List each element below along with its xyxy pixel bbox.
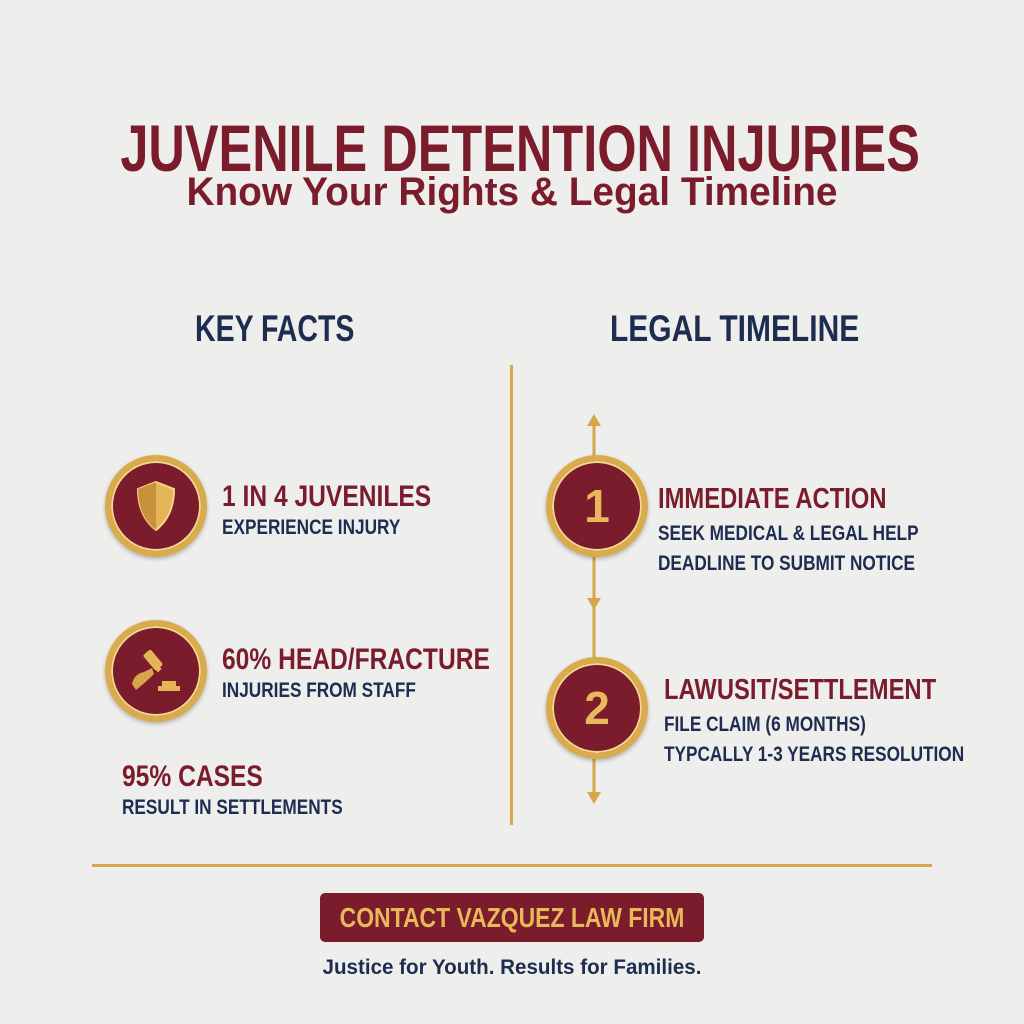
step 1 text: IMMEDIATE ACTION bbox=[658, 483, 887, 515]
fact 2: INJURIES FROM STAFF bbox=[222, 679, 416, 702]
tagline: Justice for Youth. Results for Families. bbox=[323, 956, 701, 979]
step 2 circle bbox=[546, 657, 648, 759]
step 2 text bbox=[664, 674, 964, 766]
fact 1: EXPERIENCE INJURY bbox=[222, 516, 400, 539]
panel: timeline steps bbox=[544, 454, 964, 766]
icon: gavel bbox=[105, 620, 207, 722]
step 1 circle bbox=[546, 455, 648, 557]
step 1 text: DEADLINE TO SUBMIT NOTICE bbox=[658, 552, 915, 575]
fact 1 bbox=[222, 480, 431, 539]
step 2 circle: 2 bbox=[584, 682, 610, 734]
step 1 text: SEEK MEDICAL & LEGAL HELP bbox=[658, 522, 919, 545]
fact 3: 95% CASES bbox=[122, 760, 263, 793]
title: JUVENILE DETENTION INJURIES bbox=[120, 111, 920, 185]
fact 2 bbox=[222, 643, 490, 702]
fact 2: 60% HEAD/FRACTURE bbox=[222, 643, 490, 676]
button: contact bbox=[320, 893, 704, 942]
step 2 text: LAWUSIT/SETTLEMENT bbox=[664, 674, 936, 706]
step 2 text: FILE CLAIM (6 MONTHS) bbox=[664, 713, 866, 736]
icon: shield bbox=[105, 455, 207, 557]
divider horizontal bbox=[92, 864, 932, 867]
button text: CONTACT VAZQUEZ LAW FIRM bbox=[340, 902, 684, 933]
step 1 text bbox=[658, 483, 919, 575]
fact 3 bbox=[122, 760, 343, 819]
heading: key facts: KEY FACTS bbox=[195, 308, 354, 349]
step 2 text: TYPCALLY 1-3 YEARS RESOLUTION bbox=[664, 743, 964, 766]
fact 1: 1 IN 4 JUVENILES bbox=[222, 480, 431, 513]
step 1 circle: 1 bbox=[584, 480, 610, 532]
timeline axis with arrows bbox=[587, 414, 601, 804]
panel: key facts bbox=[102, 454, 490, 819]
subtitle: Know Your Rights & Legal Timeline bbox=[186, 170, 838, 214]
divider vertical bbox=[510, 365, 513, 825]
heading: legal timeline: LEGAL TIMELINE bbox=[610, 308, 859, 349]
fact 3: RESULT IN SETTLEMENTS bbox=[122, 796, 343, 819]
